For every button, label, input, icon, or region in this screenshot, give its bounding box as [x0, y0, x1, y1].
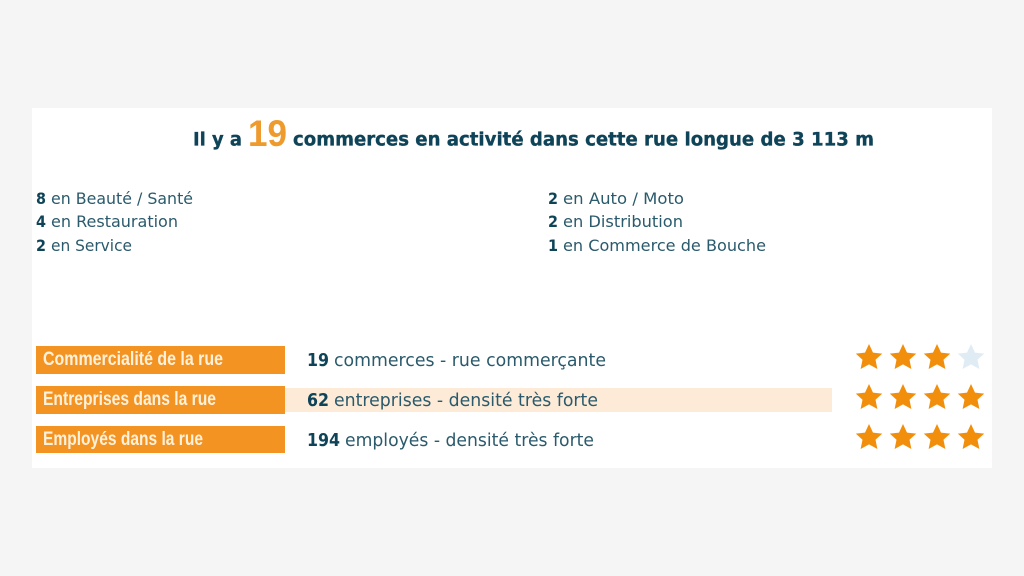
- label bar: commercialité: Commercialité de la rue: [43, 349, 223, 370]
- rating: 3 of 4 stars: [856, 344, 984, 369]
- highlight band: [285, 388, 832, 412]
- text block: right category counts: 2: [548, 212, 558, 231]
- value: commerces: 19: [307, 351, 329, 371]
- label bar: commercialité: [36, 346, 285, 374]
- text block: left category counts: 8: [36, 189, 46, 208]
- title: Il y a: [193, 128, 242, 150]
- text block: right category counts: 1: [548, 236, 558, 255]
- text block: right category counts: [548, 189, 766, 255]
- text block: left category counts: 2: [36, 236, 46, 255]
- label bar: entreprises: Entreprises dans la rue: [43, 389, 216, 410]
- title: commerces en activité dans cette rue longue de 3 113 m: [293, 128, 874, 150]
- rating: 4 of 4 stars: [856, 384, 984, 409]
- title: 19: [248, 113, 287, 154]
- label bar: employés: [36, 426, 285, 453]
- panel: white card: [32, 108, 992, 468]
- label bar: employés: Employés dans la rue: [43, 429, 203, 450]
- text block: left category counts: en Restauration: [51, 212, 178, 231]
- text block: right category counts: en Commerce de Bouche: [563, 236, 766, 255]
- text block: left category counts: en Beauté / Santé: [51, 189, 193, 208]
- row: employés: [36, 424, 984, 453]
- value: employés: 194: [307, 431, 340, 451]
- row: commercialité: [36, 344, 984, 374]
- title: [193, 113, 874, 154]
- text block: right category counts: en Distribution: [563, 212, 683, 231]
- text block: right category counts: en Auto / Moto: [563, 189, 684, 208]
- value: employés: employés - densité très forte: [345, 431, 594, 451]
- label bar: entreprises: [36, 386, 285, 414]
- text block: right category counts: 2: [548, 189, 558, 208]
- value: commerces: commerces - rue commerçante: [334, 351, 606, 371]
- text block: left category counts: [36, 189, 193, 255]
- rating: 4 of 4 stars: [856, 424, 984, 449]
- text block: left category counts: 4: [36, 212, 46, 231]
- text block: left category counts: en Service: [51, 236, 132, 255]
- value: entreprises: entreprises - densité très forte: [334, 391, 598, 411]
- row: entreprises: [36, 384, 984, 414]
- value: entreprises: 62: [307, 391, 329, 411]
